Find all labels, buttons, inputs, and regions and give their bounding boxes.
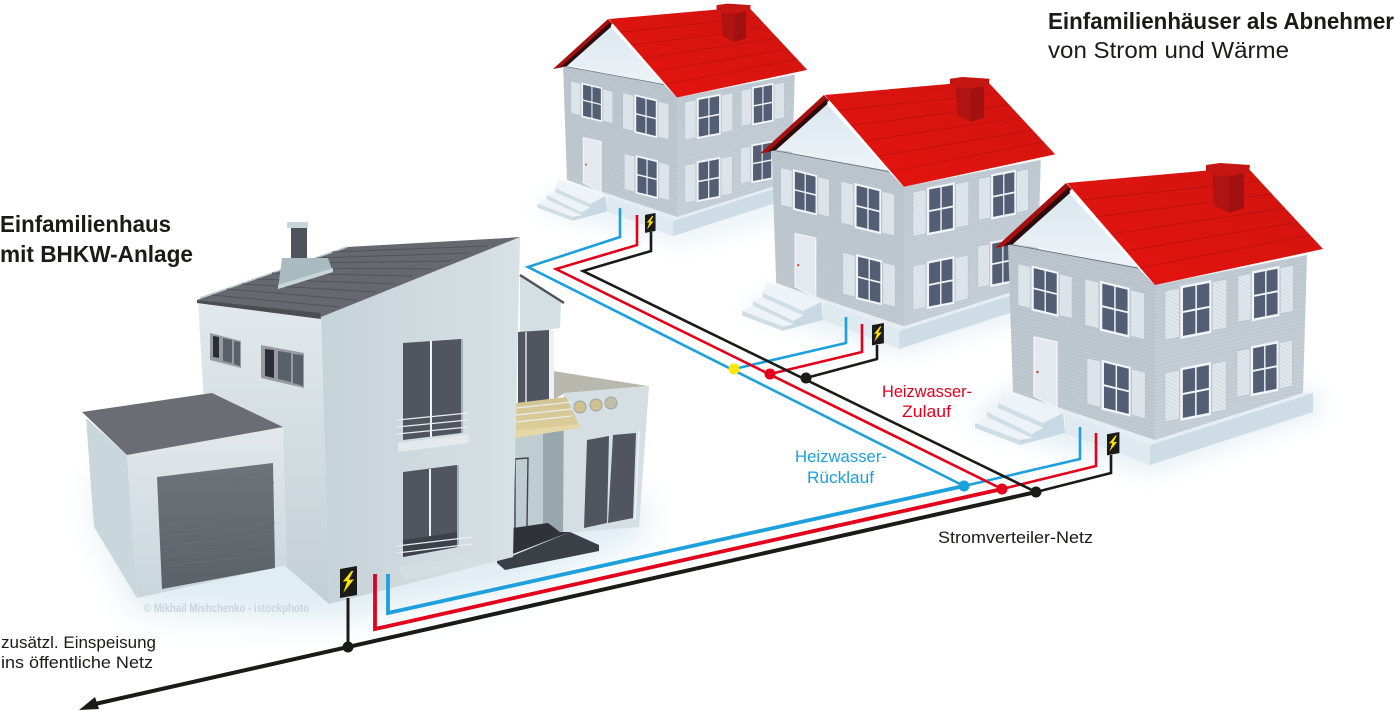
arrow: feed-in to public grid [79, 697, 99, 710]
heading: consumers: von Strom und Wärme [1048, 37, 1289, 63]
main house: front wall [321, 237, 520, 604]
main house: upper side windows [210, 333, 304, 388]
house: consumer back left [538, 4, 807, 236]
main house: upper front window with railing [397, 339, 469, 452]
icon: power meter house 3 [1107, 432, 1119, 455]
network lines: heating flow (red) [375, 215, 1096, 629]
photo credit: © Mikhail Mishchenko - istockphoto [144, 603, 309, 615]
label: heating flow: Heizwasser- [882, 382, 972, 401]
label: feed-in: zusätzl. Einspeisung [1, 633, 156, 652]
main house: chimney [278, 222, 333, 289]
label: heating return: Heizwasser- [795, 447, 887, 466]
icon: power meter main house [340, 566, 357, 598]
label: feed-in: ins öffentliche Netz [1, 653, 153, 672]
main house with CHP unit [82, 222, 649, 604]
label: power grid: Stromverteiler-Netz [938, 528, 1093, 547]
garage [82, 393, 287, 598]
icon: power meter house 2 [872, 323, 884, 345]
heading: BHKW house: Einfamilienhaus [0, 211, 171, 237]
heading: BHKW house: mit BHKW-Anlage [0, 241, 193, 267]
icon: power meter house 1 [645, 213, 656, 233]
label: feed-in [1, 633, 156, 672]
main house: lower front window with railing [397, 465, 473, 580]
label: heating flow: Zulauf [902, 402, 951, 421]
heading: consumers [1048, 8, 1394, 63]
heading: BHKW house [0, 211, 193, 267]
main house: right wing [497, 275, 649, 570]
network lines: power grid (black) [95, 232, 1111, 704]
label: heating return [795, 447, 887, 487]
network lines: cooling return (blue) [388, 208, 1080, 613]
house: consumer front right [975, 163, 1323, 465]
main house: pitched roof [197, 237, 520, 319]
floor shadows [95, 185, 1325, 622]
label: heating flow [882, 382, 972, 421]
house: consumer middle [742, 77, 1055, 349]
main house: side wall [198, 301, 329, 604]
junction dots [342, 364, 1042, 652]
label: heating return: Rücklauf [807, 468, 874, 487]
